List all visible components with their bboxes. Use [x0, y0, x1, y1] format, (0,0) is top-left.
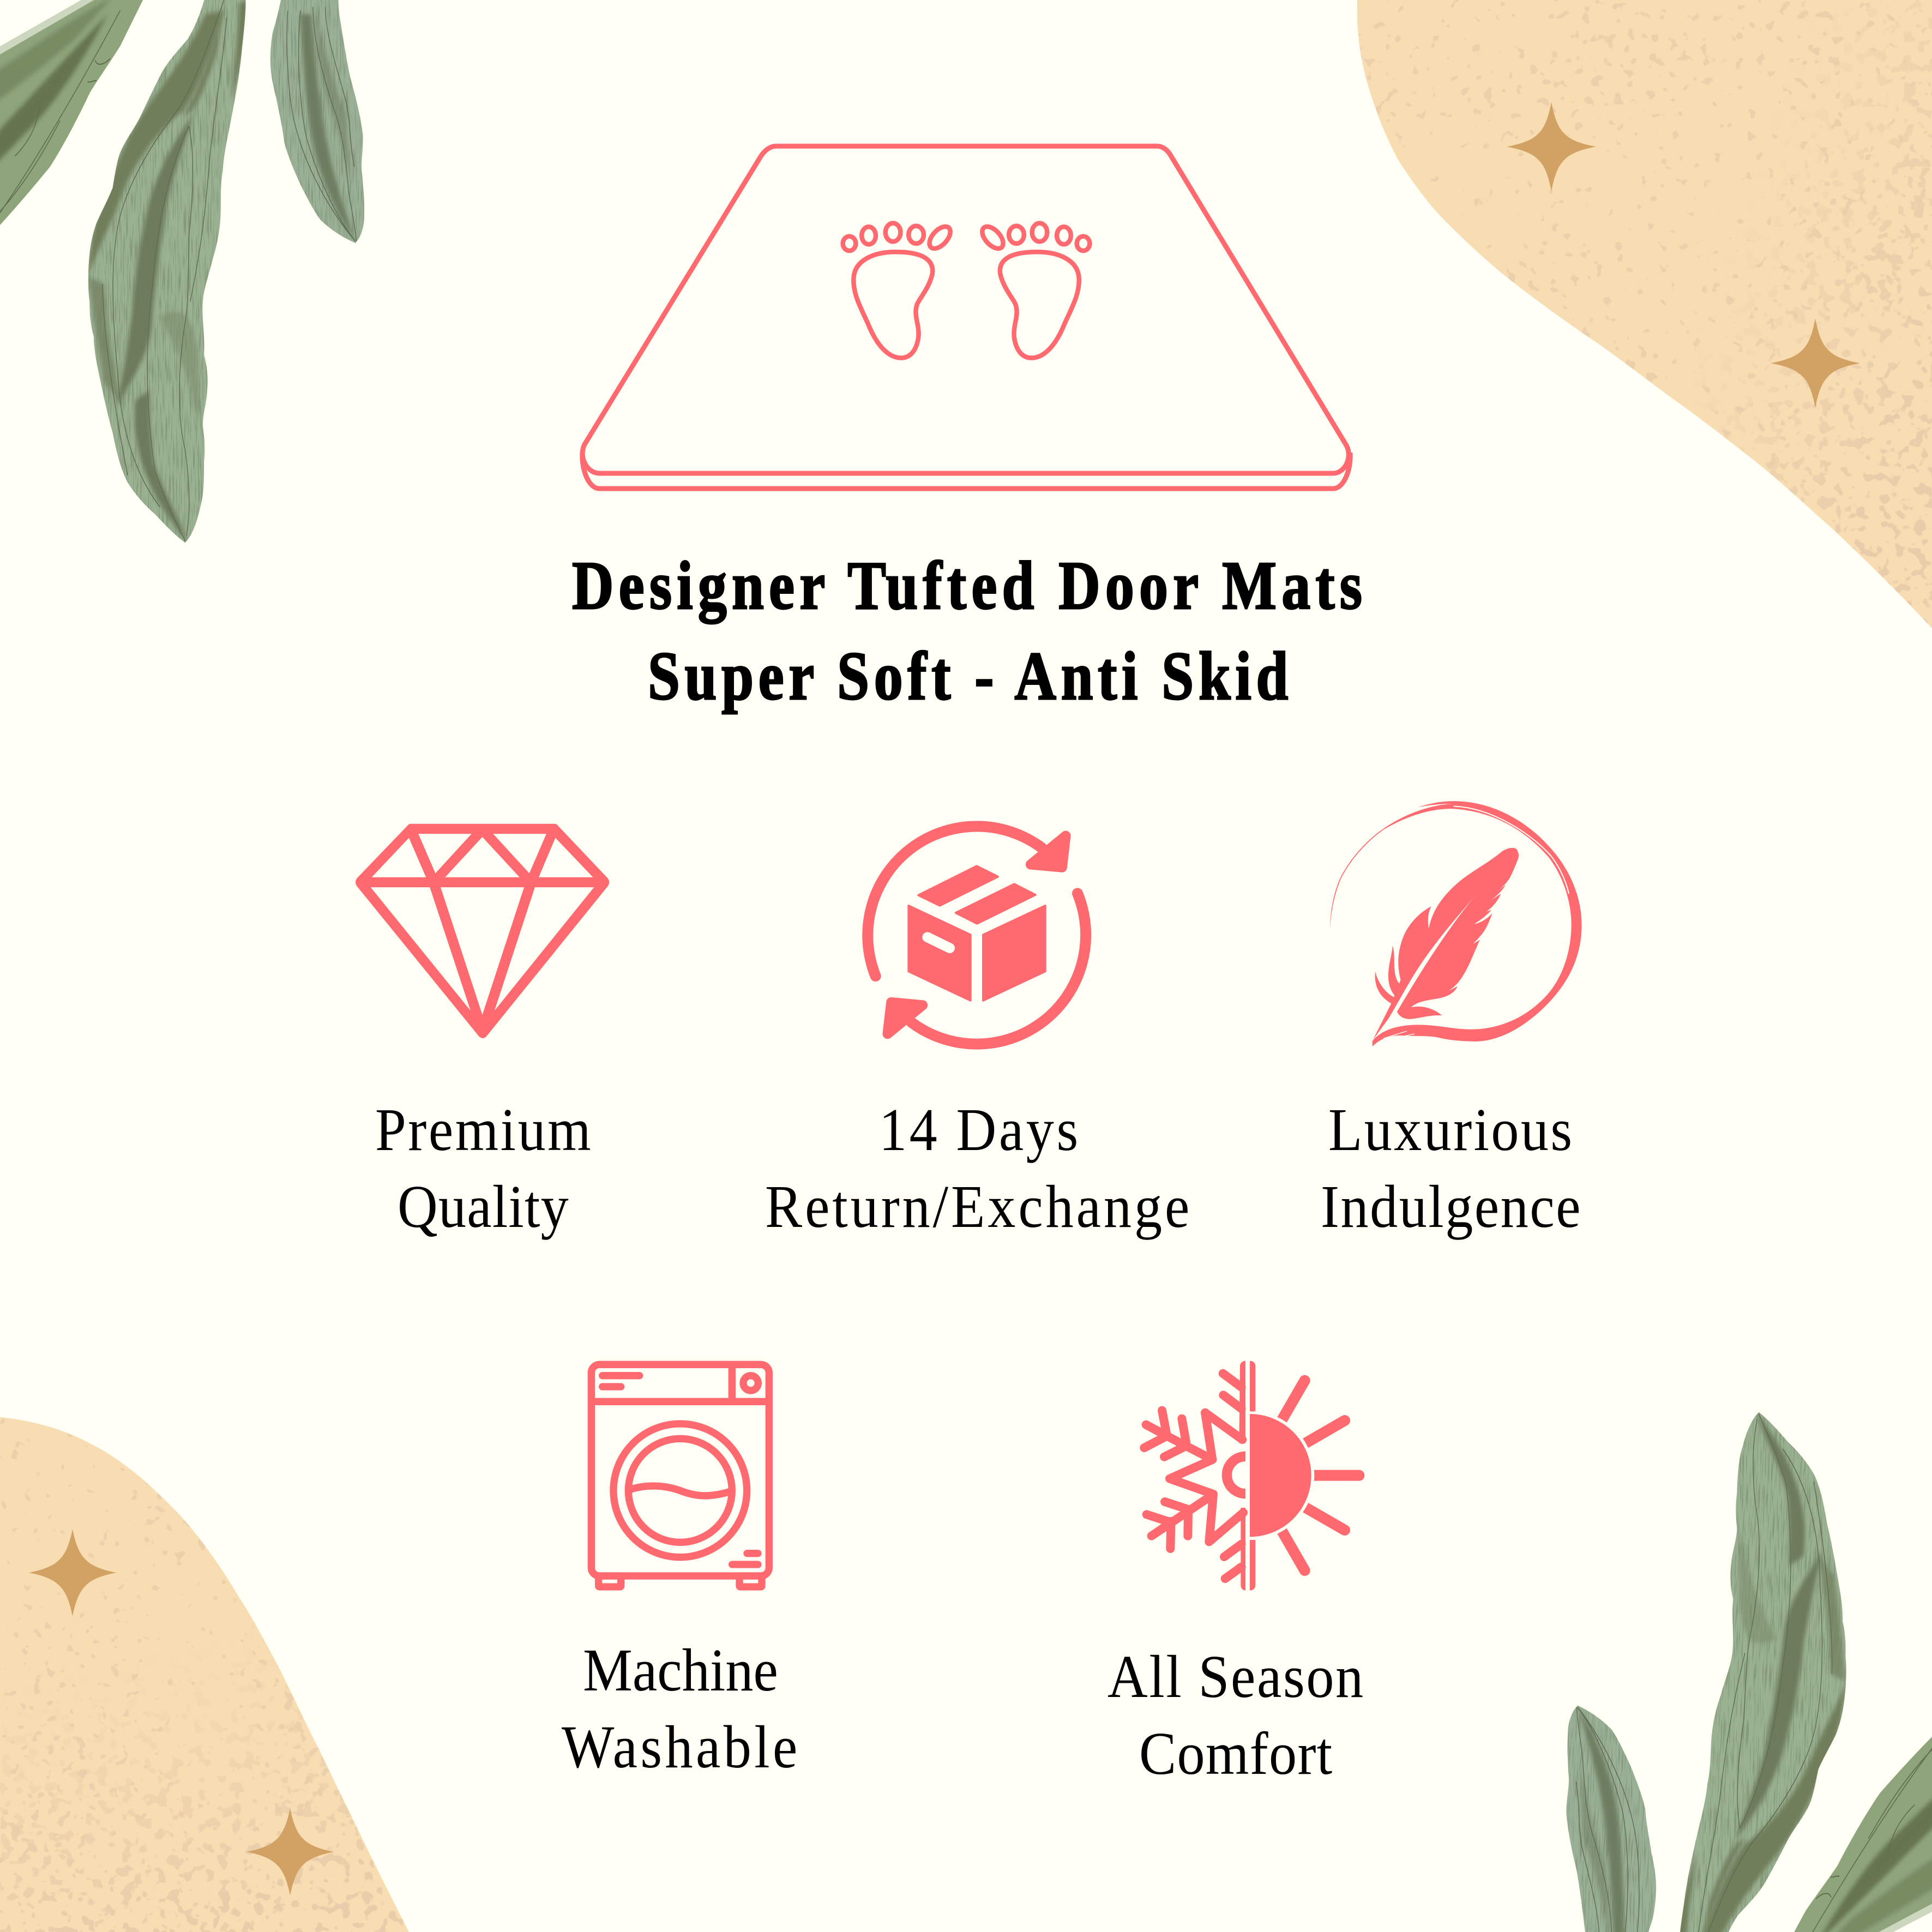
- icon: washing machine: [591, 1364, 769, 1587]
- label: Luxurious Indulgence: Luxurious: [1328, 1097, 1572, 1164]
- icon: snowflake and sun: [1144, 1361, 1359, 1591]
- blob: bottom left beige shape with stars: [0, 1412, 414, 1932]
- leaves: bottom right: [1556, 1398, 1932, 1932]
- label: All Season Comfort: [1108, 1644, 1363, 1787]
- icon: door mat with footprints: [582, 146, 1350, 489]
- icon: feather in brush circle: [1330, 801, 1582, 1046]
- label: Machine Washable: Machine: [583, 1637, 778, 1704]
- icon: return box with arrows: [868, 826, 1086, 1044]
- label: Machine Washable: Washable: [562, 1714, 797, 1781]
- label: Luxurious Indulgence: Indulgence: [1321, 1173, 1581, 1241]
- label: Premium Quality: [375, 1097, 591, 1241]
- icon: diamond: [356, 824, 609, 1038]
- label: Premium Quality: Premium: [375, 1097, 591, 1164]
- label: All Season Comfort: All Season: [1108, 1644, 1363, 1711]
- heading: Designer Tufted Door Mats: [572, 547, 1362, 624]
- label: Machine Washable: [562, 1637, 797, 1781]
- heading: [572, 547, 1362, 714]
- label: 14 Days Return/Exchange: [765, 1097, 1189, 1241]
- label: 14 Days Return/Exchange: 14 Days: [879, 1097, 1078, 1164]
- leaves: top left: [0, 0, 368, 550]
- label: 14 Days Return/Exchange: Return/Exchange: [765, 1173, 1189, 1241]
- blob: top right beige shape with stars: [1347, 0, 1932, 633]
- heading: Super Soft - Anti Skid: [648, 638, 1288, 714]
- label: Luxurious Indulgence: [1321, 1097, 1581, 1241]
- label: All Season Comfort: Comfort: [1139, 1720, 1332, 1787]
- label: Premium Quality: Quality: [398, 1173, 569, 1241]
